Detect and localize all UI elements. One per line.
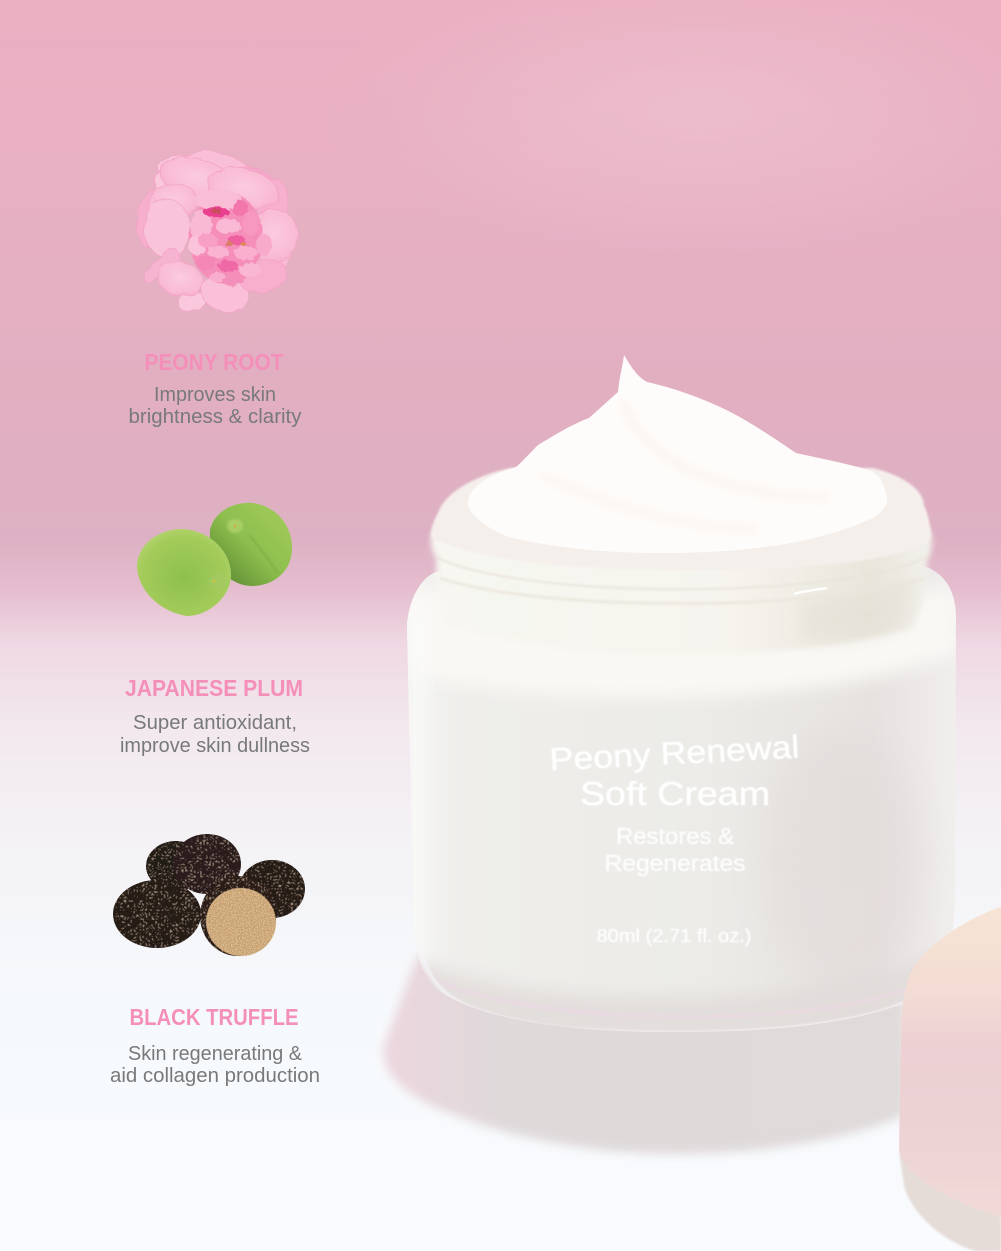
heading: peony root: PEONY ROOT [144,349,284,375]
tagline: Restores & [616,823,734,849]
jar label text [549,728,800,946]
description: peony root: brightness & clarity [128,406,302,428]
description: japanese plum: Super antioxidant, [133,712,297,734]
ingredient: japanese plum [120,503,310,757]
icon: black truffles [113,834,305,962]
product name: Peony Renewal [549,728,800,778]
icon: peony flower [136,144,302,319]
cream jar [400,355,960,1040]
truffle: cut face [201,882,281,962]
plum: back [210,503,292,586]
ingredient: peony root [128,144,302,428]
product name line two: Soft Cream [580,775,770,812]
jar shadow on table [383,955,905,1154]
description: black truffle: Skin regenerating & [128,1043,303,1065]
cream swirl [468,355,887,553]
heading: black truffle: BLACK TRUFFLE [130,1004,298,1030]
description: japanese plum: improve skin dullness [120,735,310,757]
jar neck [431,530,932,655]
description: peony root: Improves skin [154,384,276,406]
description: black truffle: aid collagen production [110,1065,320,1087]
jar rim [431,468,931,570]
icon: two green plums [137,503,292,616]
plum: front [137,529,231,616]
ingredient: black truffle [110,834,320,1087]
volume: 80ml (2.71 fl. oz.) [596,926,752,946]
heading: japanese plum: JAPANESE PLUM [125,675,303,701]
tagline: Regenerates [604,850,746,876]
jar lid [899,907,1001,1251]
jar body [400,567,960,1040]
